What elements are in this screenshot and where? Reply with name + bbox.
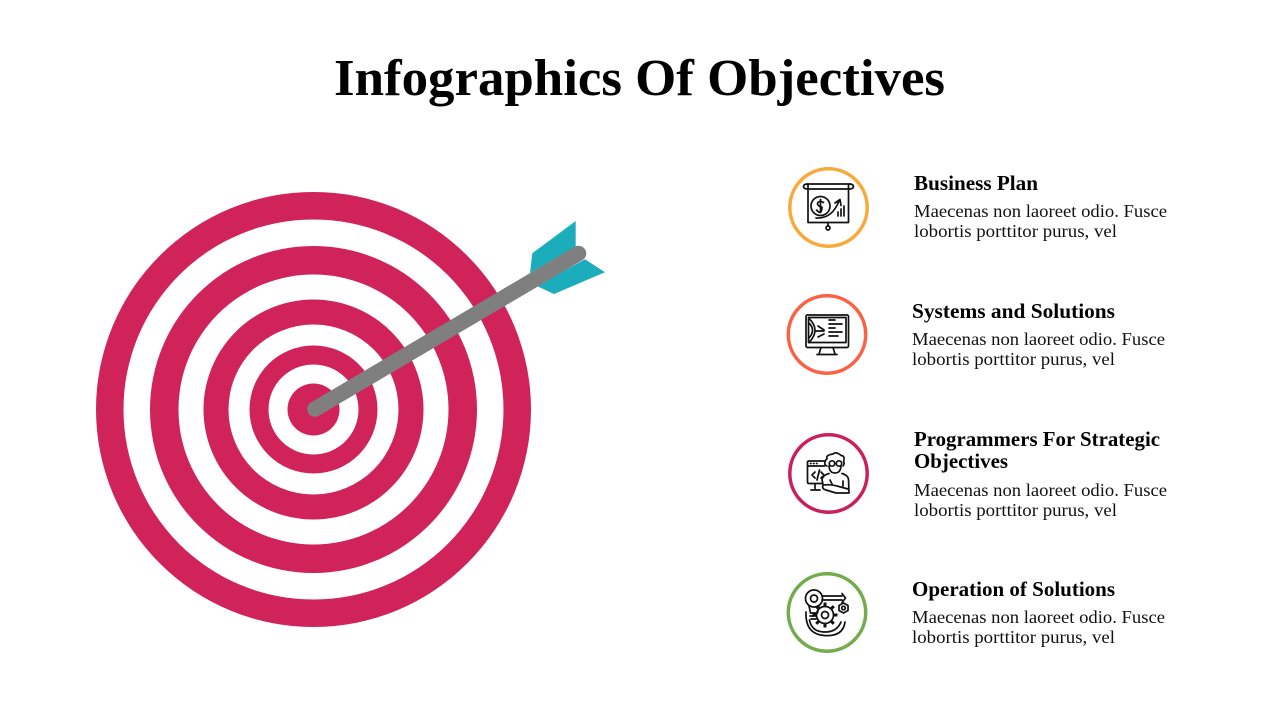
item: Operation of Solutions <box>788 574 1165 651</box>
body text: lobortis porttitor purus, vel <box>912 627 1115 647</box>
body text: lobortis porttitor purus, vel <box>914 500 1117 520</box>
icon: programmer <box>790 435 867 512</box>
body text <box>914 480 1167 520</box>
arrow <box>315 221 605 409</box>
body text <box>912 607 1165 647</box>
target rings <box>96 192 531 627</box>
heading: Programmers For Strategic <box>914 427 1160 451</box>
body text <box>912 329 1165 369</box>
heading: Objectives <box>914 449 1008 473</box>
icon: bulb and gears <box>788 574 866 651</box>
body text: lobortis porttitor purus, vel <box>914 221 1117 241</box>
title: Infographics Of Objectives <box>334 50 945 107</box>
body text: lobortis porttitor purus, vel <box>912 349 1115 369</box>
target with arrow <box>96 192 605 627</box>
icon: computer monitor <box>788 296 866 373</box>
body text: Maecenas non laoreet odio. Fusce <box>914 201 1167 221</box>
body text: Maecenas non laoreet odio. Fusce <box>914 480 1167 500</box>
item: Business Plan <box>790 169 1167 246</box>
body text <box>914 201 1167 241</box>
heading <box>914 427 1160 473</box>
heading: Systems and Solutions <box>912 299 1115 323</box>
item: Programmers For Strategic Objectives <box>790 427 1167 520</box>
heading: Operation of Solutions <box>912 577 1115 601</box>
body text: Maecenas non laoreet odio. Fusce <box>912 607 1165 627</box>
icon: presentation board with dollar <box>790 169 867 246</box>
item: Systems and Solutions <box>788 296 1165 373</box>
heading: Business Plan <box>914 171 1038 195</box>
body text: Maecenas non laoreet odio. Fusce <box>912 329 1165 349</box>
